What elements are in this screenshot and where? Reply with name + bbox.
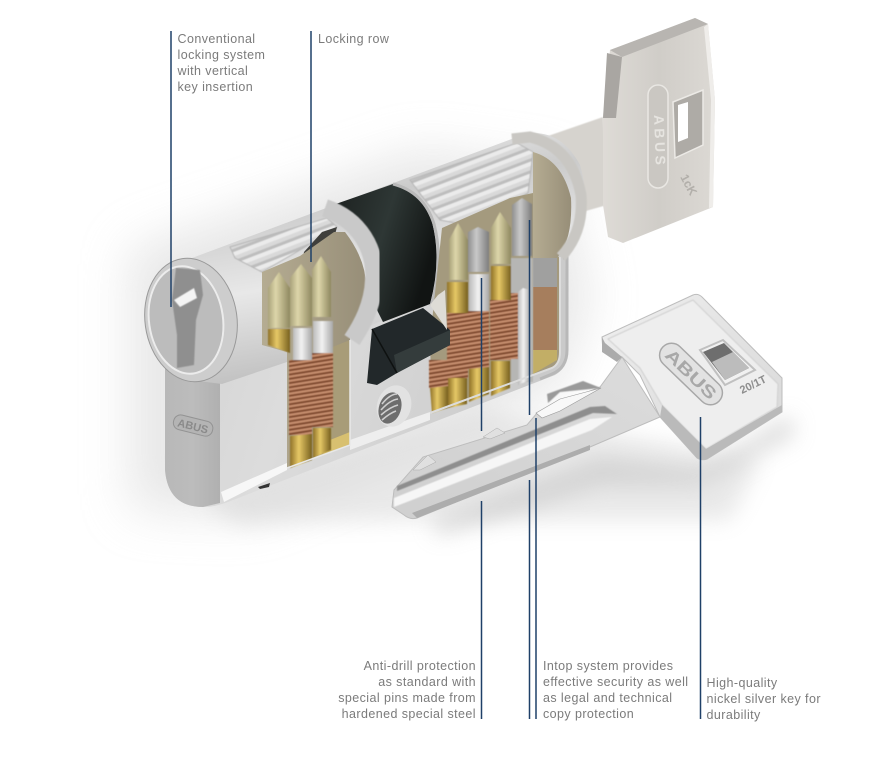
pin B (468, 227, 489, 272)
key blade (548, 117, 607, 216)
pin 2 (290, 264, 312, 326)
pin 1 (268, 272, 290, 328)
pin 3 (312, 256, 331, 317)
key edges (602, 337, 622, 362)
left pin chamber (262, 232, 366, 468)
callout: conventional locking system: key insertion (178, 80, 253, 94)
key logo: ABUS (651, 115, 669, 167)
callout: anti-drill protection (338, 278, 482, 721)
cylinder bottom notch (258, 483, 270, 489)
callout: nickel silver key (700, 417, 821, 722)
rear key behind the cylinder (548, 18, 715, 243)
key bow (603, 18, 715, 243)
callout: anti-drill protection: Anti-drill protection (364, 659, 476, 673)
callout: conventional locking system: with vertical (176, 64, 248, 78)
left collar ring (325, 208, 374, 340)
callout: nickel silver key: nickel silver key for (706, 692, 821, 706)
callout: nickel silver key: durability (706, 708, 761, 722)
blade grooves (397, 406, 617, 491)
right chamber rim (430, 257, 560, 413)
callout: conventional locking system: locking system (178, 48, 265, 62)
key logo (648, 85, 669, 188)
callout: anti-drill protection: hardened special steel (342, 707, 476, 721)
cylinder face (137, 252, 245, 388)
key square hole (673, 90, 703, 158)
key square hole (700, 340, 755, 385)
pin A (449, 223, 468, 280)
ABUS logo on cylinder: ABUS (176, 417, 209, 437)
extra spring (429, 360, 448, 388)
callout: anti-drill protection: as standard with (378, 675, 476, 689)
barrel (190, 133, 585, 384)
black cam (330, 184, 437, 322)
keyway (172, 268, 203, 368)
right pin chamber (430, 193, 560, 413)
black lever (367, 290, 450, 385)
key bow (602, 294, 782, 460)
callout: intop system (530, 220, 688, 721)
soft shadow behind cylinder (130, 150, 760, 525)
callout: locking row: Locking row (318, 32, 390, 46)
blade dimples (483, 428, 505, 439)
callout: conventional locking system (171, 31, 265, 307)
key shadow (430, 415, 795, 535)
pin C (491, 212, 511, 264)
callout: anti-drill protection: special pins made from (338, 691, 476, 705)
key marking: 20/1T (738, 373, 769, 397)
left window ribs (230, 218, 337, 272)
lock cylinder (137, 133, 585, 507)
callout: intop system: Intop system provides (543, 659, 673, 673)
callout: intop system: copy protection (543, 707, 634, 721)
callout: nickel silver key: High-quality (706, 676, 778, 690)
right pins (429, 198, 533, 413)
callout: intop system: effective security as well (543, 675, 688, 689)
right window ribs (410, 143, 533, 225)
key blade (392, 357, 660, 519)
key logo: ABUS (661, 345, 720, 403)
callout: intop system: as legal and technical (543, 691, 672, 705)
pin D (512, 198, 532, 256)
ABUS logo on cylinder (172, 413, 214, 438)
left chamber rim (287, 340, 350, 468)
key logo (655, 338, 727, 410)
cylinder fin (165, 250, 567, 507)
front key (392, 294, 795, 535)
key marking: 1cK (677, 172, 700, 198)
right collar ring (512, 137, 581, 257)
callout: conventional locking system: Conventional (178, 32, 256, 46)
threaded screw hole (371, 381, 417, 431)
left pins (268, 256, 333, 468)
blade cut notch (547, 381, 601, 403)
